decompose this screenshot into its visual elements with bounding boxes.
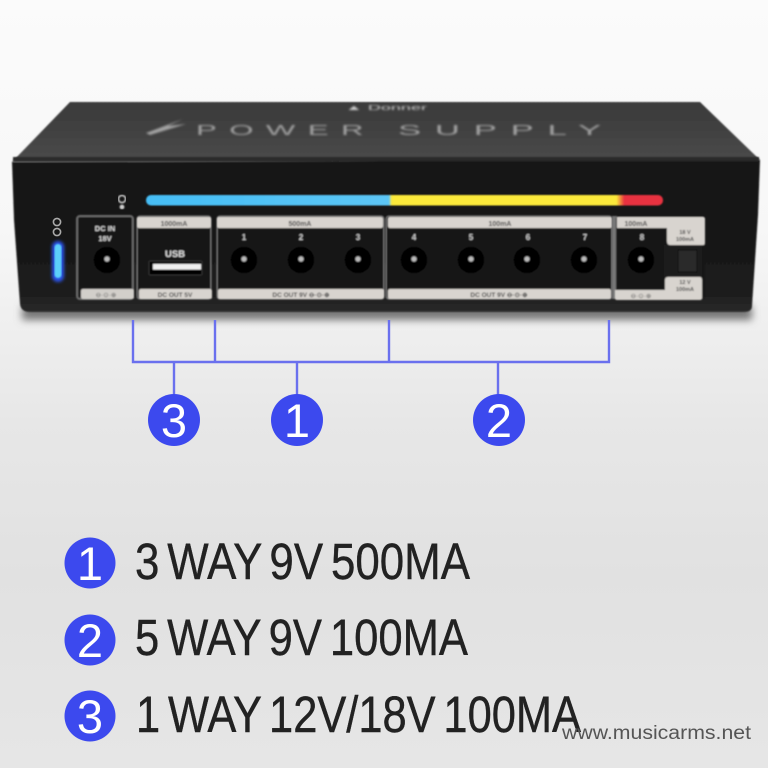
- device top face: [12, 102, 760, 162]
- legend row 1: 3 WAY 9V 500MA: [135, 533, 470, 590]
- LED colour bar: [146, 195, 663, 206]
- device front face: [12, 157, 760, 312]
- legend row 2: 2: [77, 614, 103, 667]
- panel: outputs 4 to 7, 100mA: 100mA: [489, 221, 511, 228]
- legend row 3: 1 WAY 12V/18V 100MA: [136, 686, 581, 743]
- legend row 1: 1: [77, 537, 103, 590]
- panel: output 8 with voltage switch: 8: [640, 233, 645, 242]
- device top printing: power supply: [146, 105, 615, 139]
- legend row 3: 3: [77, 690, 103, 743]
- power supply device: [12, 102, 760, 320]
- panel: USB: DC OUT 5V: [158, 292, 193, 299]
- device top printing: power supply: POWER: [196, 122, 376, 139]
- panel: DC in: DC IN: [95, 224, 115, 233]
- panel: USB: [137, 216, 212, 299]
- callout: marker 1: 1: [284, 394, 310, 447]
- panel: DC in: ⊖·⊙·⊕: [96, 292, 117, 299]
- panel: outputs 1 to 3, 500mA: 1: [242, 233, 247, 242]
- bracket lines: [133, 320, 609, 396]
- panel: DC in: 18V: [98, 234, 112, 243]
- panel: outputs 4 to 7, 100mA: 4: [412, 233, 417, 242]
- callout: marker 3: 3: [161, 394, 187, 447]
- device top printing: power supply: SUPPLY: [398, 122, 615, 139]
- panel: outputs 1 to 3, 500mA: DC OUT 9V ⊖·⊙·⊕: [272, 292, 330, 299]
- legend row 2: 5 WAY 9V 100MA: [135, 609, 468, 666]
- panel: output 8 with voltage switch: 100mA: [676, 237, 694, 243]
- panel: output 8 with voltage switch: 100mA: [676, 287, 694, 293]
- panel: output 8 with voltage switch: ⊖·⊙·⊕: [631, 293, 652, 300]
- panel: outputs 1 to 3, 500mA: 500mA: [289, 221, 311, 228]
- panel: USB: 1000mA: [161, 221, 187, 228]
- panel: DC in: [77, 216, 134, 299]
- device top printing: power supply: ▲ Donner: [345, 105, 429, 112]
- side indicator: [52, 218, 64, 282]
- panel: outputs 1 to 3, 500mA: 2: [299, 233, 304, 242]
- panel: outputs 4 to 7, 100mA: 6: [526, 233, 531, 242]
- panel: outputs 4 to 7, 100mA: [386, 216, 612, 299]
- icon: small power symbol: [118, 195, 126, 209]
- device shadow: [22, 306, 752, 320]
- panel: output 8 with voltage switch: 100mA: [625, 221, 647, 228]
- panel: outputs 1 to 3, 500mA: [217, 216, 384, 299]
- panel: output 8 with voltage switch: [612, 216, 705, 300]
- watermark: www.musicarms.net: [561, 723, 752, 744]
- panel: outputs 4 to 7, 100mA: 7: [583, 233, 588, 242]
- panel: outputs 4 to 7, 100mA: DC OUT 9V ⊖·⊙·⊕: [470, 292, 528, 299]
- panel: output 8 with voltage switch: 12 V: [679, 280, 691, 286]
- panel: outputs 4 to 7, 100mA: 5: [469, 233, 474, 242]
- callout: marker 2: [473, 394, 525, 447]
- callout: marker 3: [148, 394, 200, 447]
- panel: USB: USB: [165, 249, 185, 260]
- callout: marker 2: 2: [486, 394, 512, 447]
- callout: marker 1: [271, 394, 323, 447]
- panel: output 8 with voltage switch: 18 V: [679, 230, 691, 236]
- panel: outputs 1 to 3, 500mA: 3: [356, 233, 361, 242]
